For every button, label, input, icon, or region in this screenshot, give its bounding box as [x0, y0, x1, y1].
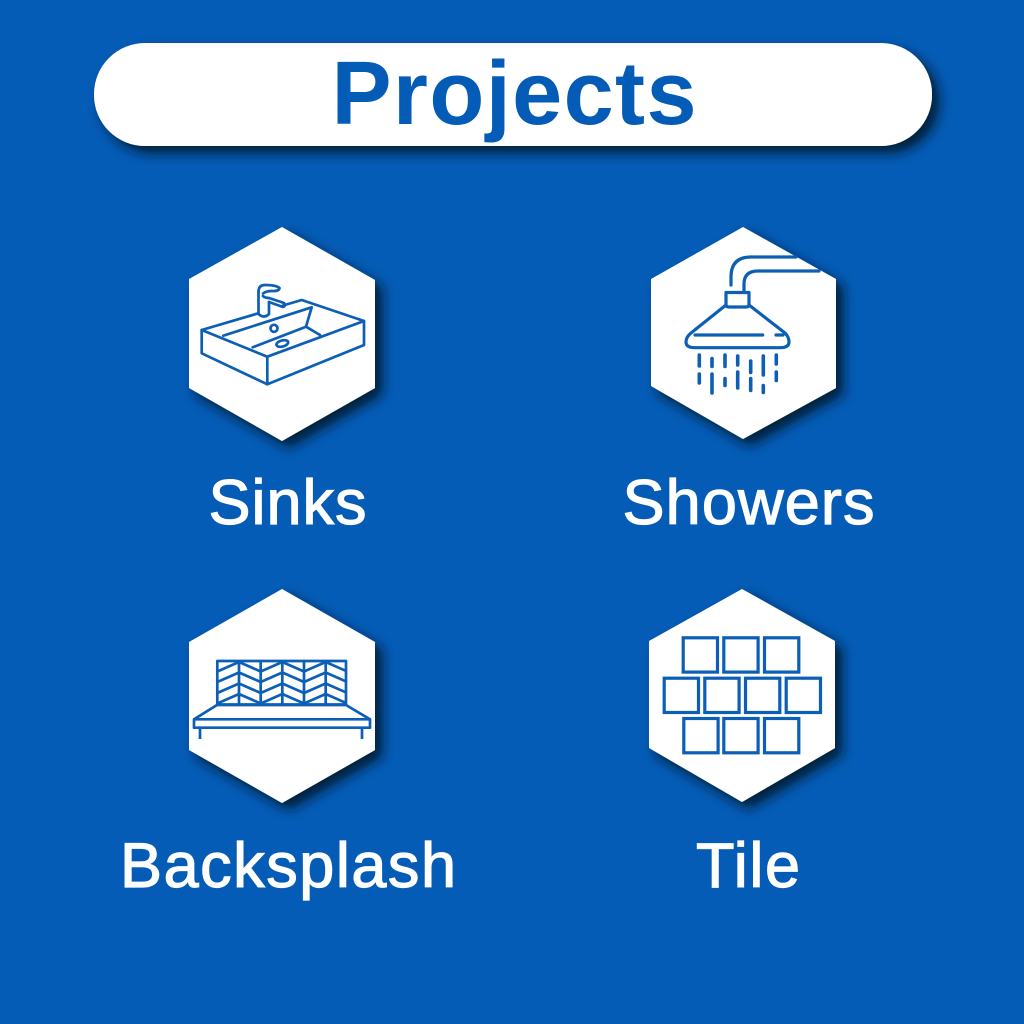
icon: tile grid	[664, 638, 820, 753]
icon: backsplash	[194, 661, 370, 739]
title: Projects	[332, 44, 696, 144]
label: backsplash: Backsplash	[120, 831, 456, 901]
hexagon: tile	[649, 589, 835, 802]
hexagon: backsplash	[189, 589, 375, 803]
panel: tile	[649, 589, 835, 901]
panel: backsplash	[120, 589, 456, 901]
panel: showers	[622, 227, 874, 538]
title banner	[94, 43, 932, 146]
label: tile: Tile	[696, 831, 800, 901]
panel: sinks	[189, 227, 375, 538]
label: sinks: Sinks	[208, 468, 366, 538]
hexagon: sinks	[189, 227, 375, 441]
icon: sink	[202, 285, 364, 384]
hexagon: showers	[651, 227, 836, 439]
icon: shower	[686, 257, 819, 393]
label: showers: Showers	[622, 468, 874, 538]
